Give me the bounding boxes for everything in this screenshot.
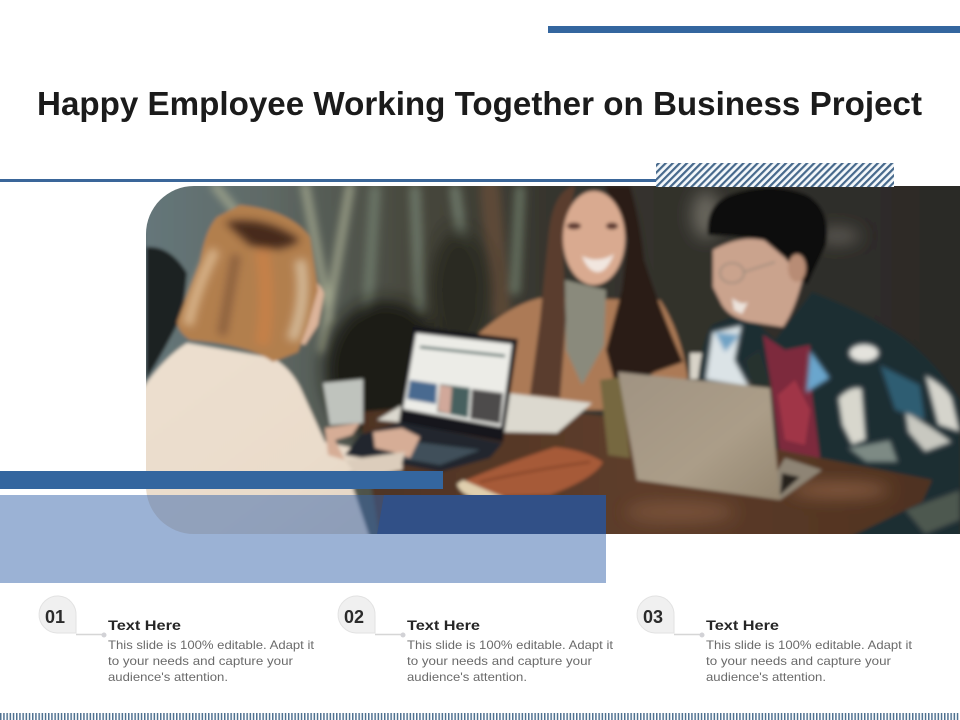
number badge 02: 02	[344, 607, 364, 627]
body text 01	[108, 639, 315, 684]
item 03	[637, 596, 913, 684]
plant leaves on wall	[215, 186, 520, 350]
man: ear	[788, 254, 806, 282]
number badge 02	[338, 596, 406, 638]
solid blue bar	[0, 471, 443, 489]
heading 03: Text Here	[706, 617, 779, 633]
man: jacket bleach patches	[705, 325, 960, 534]
woman centre: grey top	[565, 280, 606, 385]
woman centre: eyes and smile	[567, 222, 618, 272]
item 02	[338, 596, 614, 684]
drinking glass	[323, 379, 363, 425]
woman centre: face	[563, 191, 625, 285]
title: Happy Employee Working Together on Business Project	[37, 86, 922, 123]
table	[360, 402, 932, 540]
body text 01: to your needs and capture your	[108, 655, 293, 668]
black laptop: screen frame	[399, 326, 518, 442]
dark coat at left	[146, 247, 187, 380]
black laptop: display	[403, 333, 512, 427]
notebook on table	[377, 393, 592, 433]
man: white chair	[690, 353, 710, 379]
number badge 01	[39, 596, 106, 638]
heading 01: Text Here	[108, 617, 181, 633]
hatched strip	[656, 163, 894, 187]
body text 02	[407, 639, 614, 684]
beer glass	[600, 377, 630, 458]
dark lower wall and wall marks	[325, 191, 860, 440]
man: red shirt	[763, 335, 820, 458]
woman centre: sweater	[477, 298, 688, 410]
table reflections	[625, 483, 890, 522]
horizontal rule under title	[0, 179, 656, 182]
sweater of woman left	[135, 343, 403, 545]
silver laptop: base	[772, 458, 822, 500]
top accent bar	[548, 26, 960, 33]
heading 02: Text Here	[407, 617, 480, 633]
table band under overlay	[377, 495, 606, 534]
man: mouth	[732, 298, 748, 314]
body text 02: This slide is 100% editable. Adapt it	[407, 639, 614, 652]
woman left: hair	[177, 205, 318, 362]
man: face	[713, 239, 803, 327]
body text 03	[706, 639, 913, 684]
body text 02: audience's attention.	[407, 671, 527, 684]
bottom tick strip	[0, 713, 960, 720]
translucent blue block	[0, 495, 606, 583]
number badge 01: 01	[45, 607, 65, 627]
sleeve bottom	[348, 451, 406, 471]
man: denim jacket	[698, 292, 960, 540]
body text 01: This slide is 100% editable. Adapt it	[108, 639, 315, 652]
body text 03: to your needs and capture your	[706, 655, 891, 668]
display thumbnails	[407, 347, 505, 424]
body text 02: to your needs and capture your	[407, 655, 592, 668]
woman left: face	[300, 282, 326, 348]
black laptop: base and keyboard	[345, 422, 503, 472]
wall background	[146, 186, 960, 534]
woman centre: left hair	[530, 186, 575, 398]
body text 03: audience's attention.	[706, 671, 826, 684]
woman centre: right hair	[605, 186, 683, 395]
hair streaks	[188, 220, 303, 345]
body text 01: audience's attention.	[108, 671, 228, 684]
leather book	[457, 447, 603, 498]
man: dark curly hair	[708, 188, 827, 285]
number badge 03: 03	[643, 607, 663, 627]
number badge 03	[637, 596, 704, 638]
man: glasses	[720, 262, 775, 283]
photo: three colleagues at a table	[146, 186, 960, 534]
hands	[325, 423, 420, 460]
item 01	[39, 596, 315, 684]
body text 03: This slide is 100% editable. Adapt it	[706, 639, 913, 652]
silver laptop: lid	[618, 372, 780, 500]
